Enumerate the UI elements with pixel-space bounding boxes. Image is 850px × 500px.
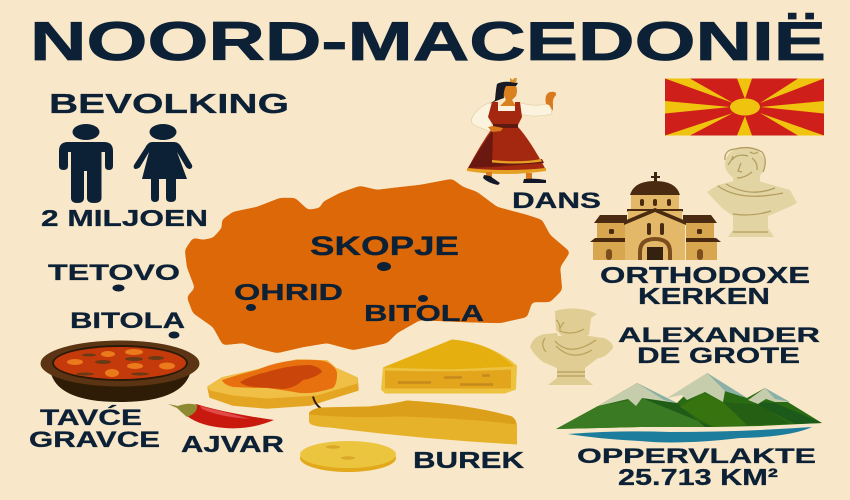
label: Skopje: SKOPJE [310,231,459,261]
heading: bevolking: BEVOLKING [49,88,289,119]
label: ajvar: AJVAR [181,431,285,457]
label: Bitola on map: BITOLA [364,300,484,326]
label: Alexander de Grote: ALEXANDER [618,324,820,347]
label: dans: DANS [512,188,601,213]
label: tavče gravče: TAVĆE [40,405,142,430]
icon: bowl of tavče gravče [40,340,200,402]
icon: burek slice [381,340,517,394]
marker: Ohrid [246,304,256,311]
icon: dancer [467,78,556,185]
icon: woman [134,124,192,202]
marker: Skopje [377,262,391,271]
marker: Bitola on map [418,295,428,302]
label: orthodoxe kerken: ORTHODOXE [600,262,810,288]
label: 2 miljoen: 2 MILJOEN [41,205,208,231]
icon: mountains and lake [556,373,822,442]
label: orthodoxe kerken [600,262,810,309]
icon: long burek [309,396,517,444]
label: Bitola west: BITOLA [70,308,185,333]
label: tavče gravče: GRAVCE [29,427,160,452]
title: NOORD-MACEDONIË [30,10,826,72]
label: Tetovo: TETOVO [48,260,180,285]
marker: Tetovo [112,284,124,292]
icon: flat bread [300,441,396,472]
marker: Bitola west [168,332,180,338]
label: orthodoxe kerken: KERKEN [638,283,770,309]
icon: classical bust [707,147,797,237]
icon: bust of Alexander [530,308,613,385]
label: tavče gravče [29,405,160,452]
icon: man [59,124,113,203]
label: Alexander de Grote: DE GROTE [637,343,800,368]
label: burek: BUREK [413,447,525,473]
label: oppervlakte [577,444,816,490]
label: oppervlakte: OPPERVLAKTE [577,444,816,468]
label: Alexander de Grote [618,324,820,368]
map of North Macedonia [185,179,570,353]
label: Ohrid: OHRID [234,279,343,305]
label: oppervlakte: 25.713 KM² [618,464,778,490]
icon: red pepper [168,404,274,428]
icon: flag of North Macedonia [665,78,824,136]
icon: ajvar on bread [208,360,358,408]
icon: orthodox church [590,172,721,260]
